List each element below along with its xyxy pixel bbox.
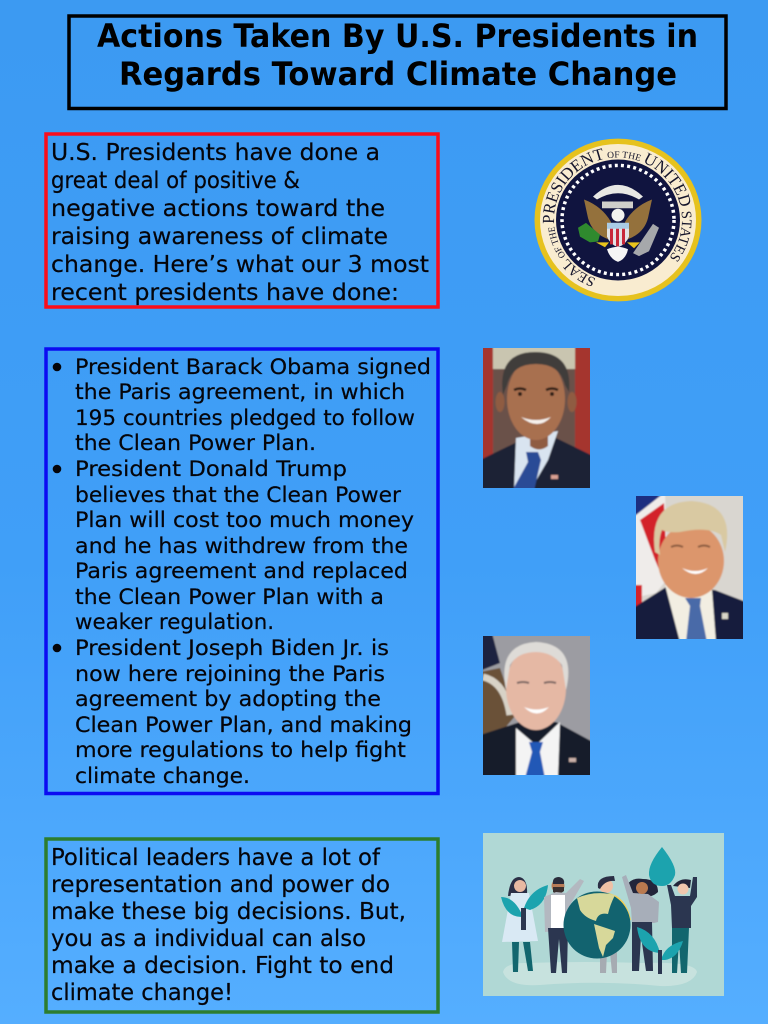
bullet list: Biden: President Joseph Biden Jr. is [75,636,389,661]
bullet list: Biden: more regulations to help fight [75,738,406,763]
title panel: Regards Toward Climate Change [119,55,677,93]
person: bearded man [544,877,584,973]
panel: introduction: raising awareness of climate [51,224,388,250]
illustration: people around the globe [483,833,724,996]
bullet list: Obama: President Barack Obama signed [75,355,431,380]
bullet list: Obama: 195 countries pledged to follow [75,406,415,431]
panel: call to action: representation and power do [51,872,390,898]
bullet list: Obama: the Clean Power Plan. [75,431,316,456]
panel: call to action: make a decision. Fight to end [51,953,394,979]
bullet list: Trump: the Clean Power Plan with a [75,585,384,610]
icon: water drop [649,847,675,886]
bullet list: Biden: climate change. [75,764,250,789]
icon: globe [564,892,630,958]
bullet list: Biden: Clean Power Plan, and making [75,713,412,738]
title panel [69,16,726,108]
panel: introduction: negative actions toward the [51,196,385,222]
bullet list: Obama [53,355,431,456]
panel: introduction: change. Here’s what our 3 most [51,252,429,278]
panel: call to action [46,839,438,1012]
person: man behind globe [598,876,631,973]
panel: president actions [46,349,438,794]
bullet list: Biden: now here rejoining the Paris [75,662,385,687]
icon: small plant [637,927,683,974]
bullet list: Trump: Paris agreement and replaced [75,559,408,584]
panel: call to action: you as a individual can also [51,926,366,952]
panel: introduction: U.S. Presidents have done a [51,140,380,166]
bullet list: Trump [53,457,414,635]
icon: presidential seal: SEAL OF THE PRESIDENT OF THE UNITED STATES [542,148,692,286]
bullet list: Obama: the Paris agreement, in which [75,380,405,405]
photo: Donald Trump [633,493,746,642]
bullet list: Trump: believes that the Clean Power [75,483,401,508]
person: woman in grey [622,875,659,971]
bullet list: Trump: President Donald Trump [75,457,347,482]
panel: call to action: make these big decisions. But, [51,899,406,925]
panel: call to action: Political leaders have a lot of [51,845,381,871]
panel: introduction [46,134,438,307]
bullet list: Biden: agreement by adopting the [75,687,381,712]
bullet list: Trump: and he has withdrew from the [75,534,408,559]
photo: Joseph Biden [480,633,593,778]
bullet list: Trump: Plan will cost too much money [75,508,414,533]
title panel: Actions Taken By U.S. Presidents in [97,17,698,55]
panel: introduction: recent presidents have done: [51,280,399,306]
bullet list: Trump: weaker regulation. [75,610,274,635]
person: man raising arms [667,877,697,973]
panel: introduction: great deal of positive & [51,168,300,194]
person: woman with plant [501,877,548,972]
photo: Barack Obama [480,345,593,491]
panel: call to action: climate change! [51,980,233,1006]
bullet list: Biden [53,636,412,789]
